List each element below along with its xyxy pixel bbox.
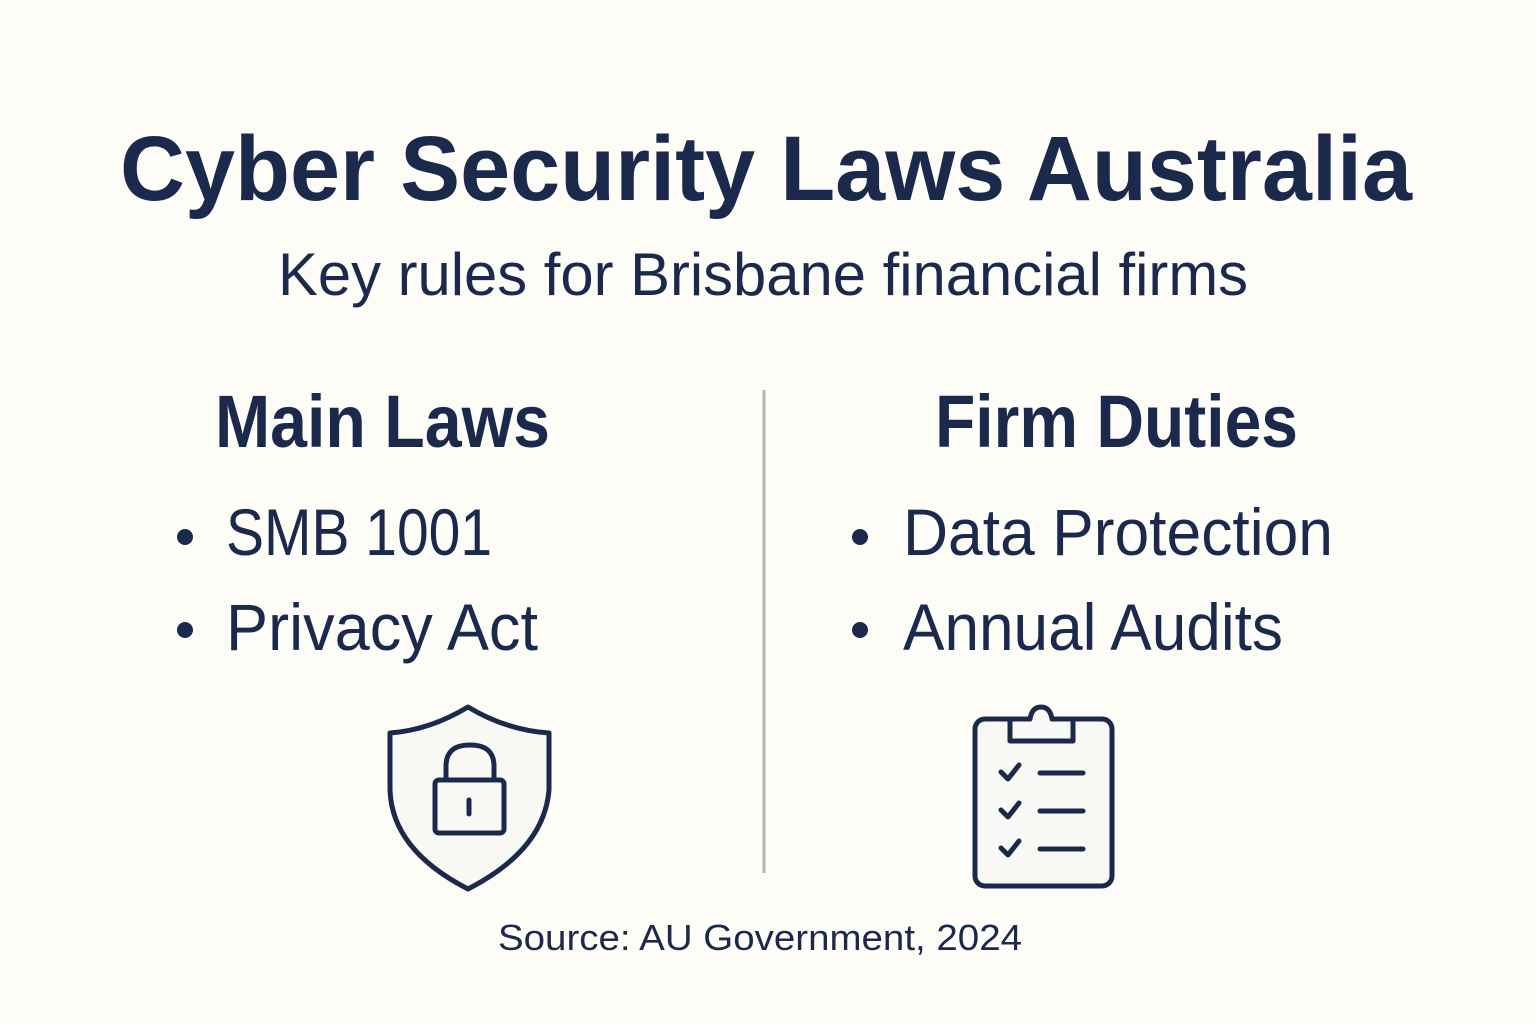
panel: main laws [177,380,550,889]
divider [762,390,766,873]
heading: Main Laws: Main Laws [215,380,550,463]
source note: Source: AU Government, 2024 [498,917,1022,958]
icon: clipboard checklist [975,707,1112,886]
subtitle: Key rules for Brisbane financial firms [278,241,1248,308]
bullet: Annual Audits: Annual Audits [903,590,1283,664]
heading: Firm Duties: Firm Duties [935,380,1298,463]
title: Cyber Security Laws Australia [120,118,1413,220]
icon: shield with lock [390,707,549,889]
bullet: SMB 1001: SMB 1001 [226,495,492,569]
bullet: Privacy Act: Privacy Act [226,590,538,664]
bullet: Data Protection: Data Protection [903,495,1333,569]
panel: firm duties [852,380,1333,886]
